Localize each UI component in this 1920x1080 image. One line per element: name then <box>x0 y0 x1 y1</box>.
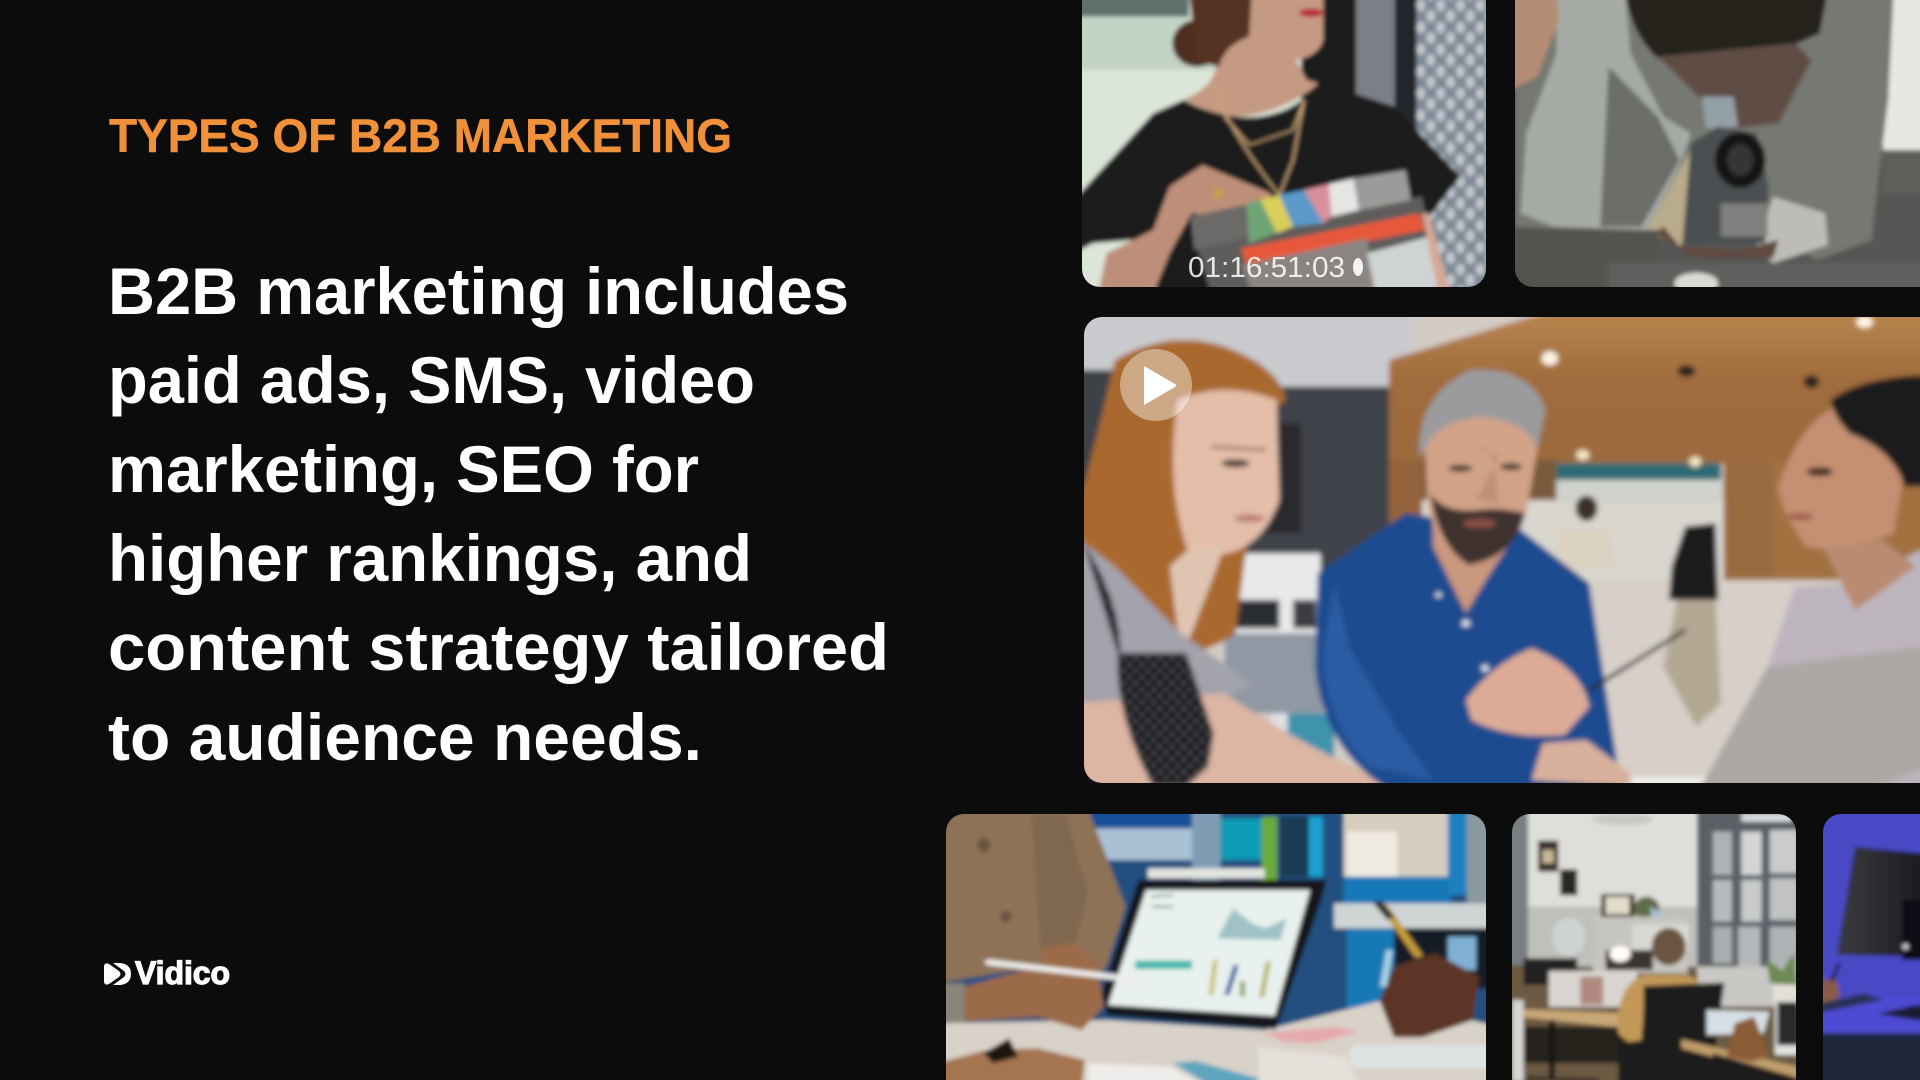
body statement text: paid ads, SMS, video <box>108 343 755 417</box>
laptop and table <box>1627 774 1706 783</box>
body statement text: content strategy tailored <box>108 610 889 684</box>
body statement text: higher rankings, and <box>108 521 752 595</box>
photo panel: three colleagues in a meeting <box>1071 310 1920 790</box>
photo panel: tablet with charts on desk <box>936 808 1498 1080</box>
photo panel: monitor on purple set <box>1817 808 1920 1080</box>
heading: types of B2B marketing: TYPES OF B2B MARKETING <box>109 109 732 162</box>
body statement text: to audience needs. <box>108 700 702 774</box>
video timecode overlay: 01:16:51:03 <box>1188 252 1345 284</box>
photo panel: person working in office <box>1501 808 1804 1080</box>
photo panel: man filming with camcorder <box>1510 0 1920 294</box>
logo wordmark: Vidico <box>135 955 230 991</box>
icon: Vidico play mark <box>104 963 131 985</box>
logo: Vidico <box>104 955 230 991</box>
body statement text <box>108 254 889 774</box>
body statement text: B2B marketing includes <box>108 254 849 328</box>
icon: video play button <box>1120 349 1192 421</box>
photo panel: woman holding clapperboard <box>1074 0 1496 293</box>
body statement text: marketing, SEO for <box>108 432 699 506</box>
